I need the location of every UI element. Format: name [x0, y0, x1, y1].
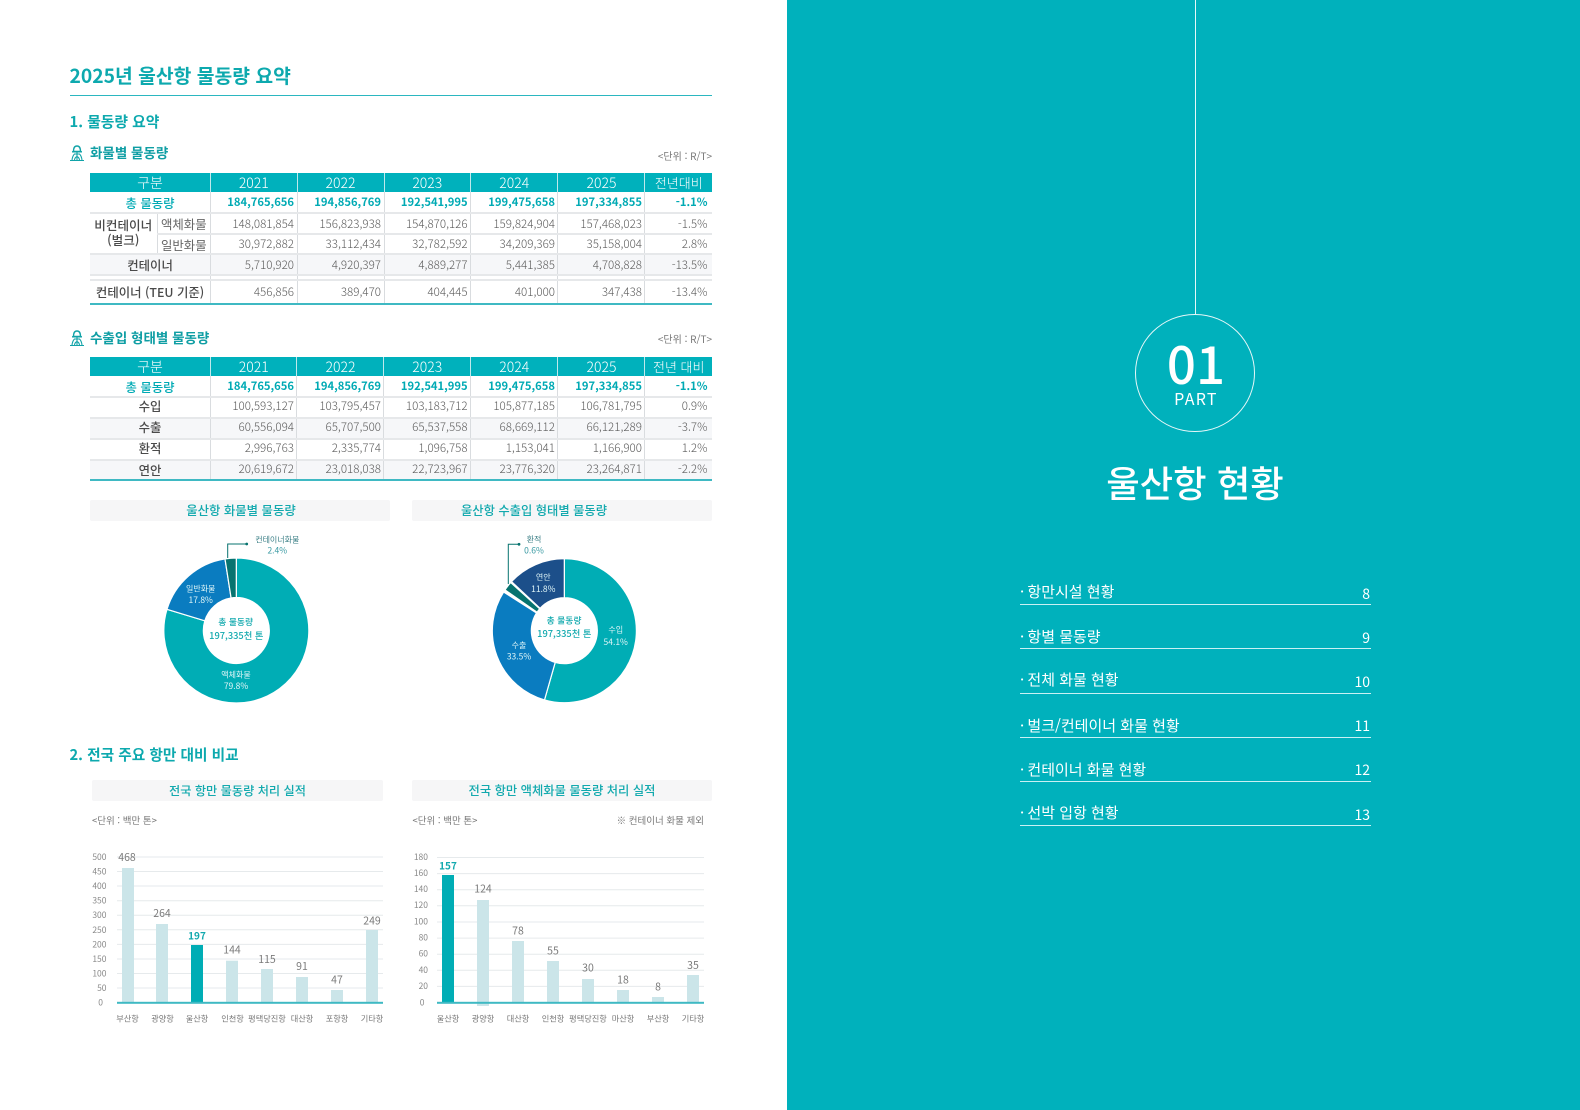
row: container TEU: 404,445: [427, 284, 468, 300]
subheading text: 수출입 형태별 물동량: [90, 327, 209, 347]
part number: 01: [1167, 324, 1225, 398]
row: container: -13.5%: [672, 257, 708, 273]
row: general bulk: 33,112,434: [326, 236, 381, 252]
page title: 2025년 울산항 물동량 요약: [70, 61, 291, 89]
list item: 선박 입항 현황: [1020, 800, 1371, 826]
bar chart: national throughput: 50: [97, 982, 107, 994]
slice labels: 액체화물: [221, 670, 251, 680]
list item: 항별 물동량: 9: [1362, 628, 1370, 648]
row: transshipment: 1,153,041: [506, 440, 555, 456]
row: transshipment: 2,335,774: [332, 440, 381, 456]
row: transshipment: 1,166,900: [593, 440, 642, 456]
gridlines and y axis: [117, 857, 383, 988]
row: export: 65,537,558: [412, 419, 468, 435]
leader line: [228, 544, 247, 558]
value labels: 468: [118, 850, 136, 865]
list item: 항만시설 현황: 8: [1362, 584, 1370, 604]
bars: [122, 868, 378, 1003]
category labels: 인천항: [221, 1012, 244, 1024]
row: container TEU: [96, 283, 708, 301]
row: export: 60,556,094: [239, 419, 294, 435]
row: transshipment: [139, 439, 708, 457]
slice labels: [186, 534, 299, 692]
bar chart: national throughput: 350: [92, 895, 107, 907]
chart title: national throughput: [92, 780, 383, 801]
row: total: 184,765,656: [227, 194, 294, 210]
bar chart: national liquid throughput: 100: [414, 916, 428, 928]
row: import: 100,593,127: [232, 398, 294, 414]
row: import: [139, 397, 708, 415]
unit note: <단위 : R/T>: [658, 331, 712, 346]
row: container TEU: -13.4%: [672, 284, 708, 300]
bars: [442, 875, 699, 1006]
spacer row: [90, 275, 712, 280]
unit note: left bar chart: <단위 : 백만 톤>: [92, 813, 157, 827]
category labels: 평택당진항: [569, 1012, 607, 1024]
category labels: 대산항: [507, 1012, 530, 1024]
row: total: 194,856,769: [314, 378, 381, 394]
bar chart: national liquid throughput: 80: [419, 932, 428, 944]
row: container: 5,710,920: [245, 257, 294, 273]
row: container: 5,441,385: [506, 257, 555, 273]
baseline: [117, 1002, 383, 1004]
row: coastal: 23,264,871: [587, 461, 642, 477]
list item: 선박 입항 현황: · 선박 입항 현황: [1020, 802, 1119, 823]
row: general bulk: 30,972,882: [239, 236, 294, 252]
bar chart: national liquid throughput: 40: [419, 964, 428, 976]
chart title: national liquid throughput: 전국 항만 액체화물 물동량 처리 실적: [469, 781, 655, 799]
row: container: 4,889,277: [418, 257, 468, 273]
center total: [537, 614, 592, 640]
row: general bulk: 34,209,369: [500, 236, 555, 252]
row: transshipment: 1.2%: [682, 440, 708, 456]
row: liquid bulk: 148,081,854: [232, 216, 294, 232]
value labels: [118, 850, 381, 988]
row: transshipment: 1,096,758: [418, 440, 468, 456]
donut ring: [164, 558, 309, 703]
row: coastal: 20,619,672: [239, 461, 294, 477]
row: total: -1.1%: [676, 194, 708, 210]
center total: 총 물동량: [218, 615, 253, 628]
slice labels: 수입: [608, 624, 623, 636]
category labels: 부산항: [116, 1012, 139, 1024]
list item: 전체 화물 현황: · 전체 화물 현황: [1020, 668, 1119, 690]
heading: section 2: 2. 전국 주요 항만 대비 비교: [70, 744, 239, 765]
row: coastal: -2.2%: [678, 461, 708, 477]
list item: 컨테이너 화물 현황: · 컨테이너 화물 현황: [1020, 759, 1146, 780]
row: liquid bulk: [94, 214, 708, 248]
leader line: [508, 544, 519, 584]
row: import: 0.9%: [682, 398, 708, 414]
value labels: 144: [223, 942, 241, 958]
row: total: 184,765,656: [227, 378, 294, 394]
bar chart: national liquid throughput: [414, 851, 705, 1024]
value labels: 264: [153, 906, 171, 921]
header row: 2024: [499, 356, 529, 376]
bar chart: national liquid throughput: 60: [419, 948, 428, 960]
icon: ship: [70, 145, 84, 161]
row: container TEU: 401,000: [515, 284, 555, 300]
bar chart: national throughput: [92, 850, 384, 1024]
baseline: [437, 1002, 704, 1004]
category labels: 부산항: [647, 1012, 670, 1024]
page title: [70, 66, 712, 96]
slice labels: 2.4%: [267, 544, 287, 556]
table: import export throughput: [90, 356, 712, 481]
category labels: 기타항: [361, 1012, 384, 1024]
bar chart: national liquid throughput: 0: [420, 996, 425, 1008]
row: liquid bulk: 157,468,023: [580, 216, 642, 232]
row: export: 66,121,289: [587, 419, 642, 435]
header row: 2025: [586, 356, 616, 376]
subheading: import export throughput: [70, 327, 712, 347]
list item: 선박 입항 현황: 13: [1354, 805, 1370, 825]
row: export: 65,707,500: [326, 419, 381, 435]
donut chart: cargo type: [164, 534, 309, 703]
header row: 2023: [412, 172, 442, 192]
bar chart: national liquid throughput: 120: [414, 899, 428, 911]
category labels: 광양항: [151, 1012, 174, 1024]
bar chart: national throughput: 250: [92, 924, 107, 936]
slice labels: 환적: [527, 534, 541, 545]
row: general bulk: 2.8%: [682, 236, 708, 252]
list item: 항별 물동량: [1020, 623, 1371, 649]
value labels: 78: [512, 924, 524, 938]
bar chart: national liquid throughput: 140: [414, 883, 428, 895]
contents list: [1020, 580, 1371, 826]
row: total: 194,856,769: [314, 194, 381, 210]
row: container: 4,920,397: [332, 257, 381, 273]
list item: 벌크/컨테이너 화물 현황: [1020, 712, 1371, 738]
list item: 전체 화물 현황: 10: [1354, 672, 1370, 692]
row: coastal: 23,018,038: [326, 461, 381, 477]
subheading: cargo throughput: [70, 142, 712, 163]
chart title: cargo donut: 울산항 화물별 물동량: [186, 501, 296, 519]
chart title: national liquid throughput: [412, 780, 712, 801]
value labels: 35: [687, 958, 699, 973]
list item: 컨테이너 화물 현황: 12: [1354, 760, 1370, 780]
donut chart: trade type: [492, 534, 636, 703]
category labels: 포항항: [326, 1012, 349, 1024]
header row: 전년 대비: [653, 357, 704, 376]
row: import: 103,183,712: [406, 398, 468, 414]
header row: 구분: [137, 172, 163, 192]
part badge circle: [1135, 314, 1255, 432]
header row: [90, 356, 712, 479]
list item: 벌크/컨테이너 화물 현황: 11: [1354, 716, 1370, 736]
row: total: 199,475,658: [488, 378, 555, 394]
row: total: 192,541,995: [401, 194, 468, 210]
slice labels: 컨테이너화물: [255, 534, 299, 546]
header row: (벌크): [107, 230, 139, 248]
row: export: 수출: [139, 418, 161, 436]
row: container TEU: 456,856: [254, 284, 294, 300]
category labels: 울산항: [437, 1012, 460, 1024]
row: total: 197,334,855: [575, 378, 642, 394]
row: export: 68,669,112: [500, 419, 555, 435]
unit note: right bar chart: <단위 : 백만 톤>: [412, 813, 477, 827]
center total: 197,335천 톤: [209, 628, 264, 642]
header row: 2022: [326, 172, 355, 192]
category labels: 평택당진항: [248, 1012, 286, 1024]
row: import: 106,781,795: [580, 398, 642, 414]
value labels: 55: [547, 944, 559, 958]
row: container: 4,708,828: [593, 257, 642, 273]
header row: 2025: [586, 172, 616, 192]
slice labels: 연안: [536, 572, 551, 583]
row: total: 192,541,995: [401, 378, 468, 394]
header row: 2022: [326, 356, 355, 376]
row: total: [126, 194, 708, 212]
category labels: 기타항: [682, 1012, 705, 1024]
chart title: trade type donut: [412, 500, 712, 521]
list item: 벌크/컨테이너 화물 현황: · 벌크/컨테이너 화물 현황: [1020, 714, 1180, 736]
row: coastal: 23,776,320: [500, 461, 555, 477]
row: container TEU: 컨테이너 (TEU 기준): [96, 283, 204, 301]
row: container: 컨테이너: [127, 256, 173, 274]
row: liquid bulk: 159,824,904: [493, 216, 555, 232]
bar chart: national throughput: 200: [92, 938, 107, 950]
unit note: <단위 : R/T>: [658, 148, 712, 163]
row: liquid bulk: 액체화물: [161, 215, 207, 233]
header row: 2024: [499, 172, 529, 192]
panel: right teal cover: [787, 0, 1580, 1110]
row: container: [90, 255, 712, 274]
value labels: 157: [439, 858, 457, 872]
list item: 항만시설 현황: · 항만시설 현황: [1020, 580, 1114, 602]
bar chart: national liquid throughput: 180: [414, 851, 428, 863]
row: export: [90, 418, 712, 438]
value labels: 18: [617, 972, 629, 988]
row: import: 105,877,185: [493, 398, 555, 414]
bar chart: national throughput: 400: [92, 880, 107, 892]
slice labels: 수출: [512, 640, 526, 651]
chart title: national throughput: 전국 항만 물동량 처리 실적: [169, 781, 306, 799]
list item: 전체 화물 현황: [1020, 668, 1371, 694]
row: general bulk: 32,782,592: [412, 236, 468, 252]
row: total: 총 물동량: [126, 194, 175, 212]
row: coastal: 연안: [139, 461, 161, 479]
slice labels: 11.8%: [531, 583, 556, 595]
value labels: 197: [188, 928, 206, 942]
slice labels: 54.1%: [604, 636, 628, 648]
bar chart: national throughput: 0: [98, 996, 103, 1008]
value labels: 124: [474, 882, 492, 896]
center total: 총 물동량: [547, 614, 581, 626]
row: general bulk: [161, 236, 708, 254]
hanging line: [1195, 0, 1196, 314]
header row: 구분: [137, 356, 163, 376]
header row: [90, 172, 712, 301]
chart title: trade type donut: 울산항 수출입 형태별 물동량: [461, 501, 607, 519]
row: liquid bulk: -1.5%: [678, 216, 708, 232]
center total: 197,335천 톤: [537, 626, 592, 640]
list item: 항만시설 현황: [1020, 578, 1371, 604]
part label: PART: [1174, 386, 1218, 410]
bar chart: national throughput: 300: [92, 909, 107, 921]
bar chart: national throughput: 100: [92, 968, 107, 980]
header row: 전년대비: [655, 173, 703, 192]
value labels: 91: [296, 959, 308, 974]
row: import: 103,795,457: [319, 398, 381, 414]
icon: ship: [70, 330, 84, 346]
row: total: -1.1%: [676, 378, 708, 394]
slice labels: 33.5%: [507, 650, 531, 662]
center total: [209, 615, 264, 642]
header row: 2023: [412, 356, 442, 376]
row: transshipment: 2,996,763: [245, 440, 294, 456]
row: total: [126, 378, 708, 396]
bar chart: national throughput: 150: [92, 953, 107, 965]
bar chart: national throughput: 500: [92, 851, 107, 863]
slice labels: 17.8%: [189, 594, 213, 606]
row: export: -3.7%: [678, 419, 708, 435]
row: coastal: [90, 461, 712, 479]
value labels: 47: [331, 972, 343, 988]
row: import: 수입: [139, 397, 161, 415]
donut ring: [492, 559, 636, 703]
slice labels: [507, 534, 628, 662]
row: liquid bulk: 156,823,938: [319, 216, 381, 232]
category labels: 울산항: [186, 1012, 209, 1024]
bar chart: national throughput: 450: [92, 866, 107, 878]
category labels: [116, 1012, 384, 1024]
row: coastal: 22,723,967: [412, 461, 468, 477]
row: liquid bulk: 154,870,126: [406, 216, 468, 232]
row: general bulk: 일반화물: [161, 236, 207, 254]
value labels: [439, 858, 699, 994]
list item: 컨테이너 화물 현황: [1020, 756, 1371, 782]
bar chart: national liquid throughput: 20: [419, 980, 428, 992]
bar chart: national liquid throughput: 160: [414, 867, 428, 879]
part title: 울산항 현황: [1106, 456, 1284, 508]
header row: 2021: [239, 356, 269, 376]
row: total: 197,334,855: [575, 194, 642, 210]
value labels: 115: [258, 952, 276, 967]
row: total: 199,475,658: [488, 194, 555, 210]
row: container TEU: 347,438: [602, 284, 642, 300]
list item: 항별 물동량: · 항별 물동량: [1020, 626, 1101, 647]
category labels: 인천항: [542, 1012, 565, 1024]
row: liquid bulk: 비컨테이너: [94, 214, 152, 234]
slice labels: 일반화물: [186, 584, 215, 594]
slice labels: 79.8%: [224, 680, 248, 692]
category labels: 마산항: [612, 1012, 635, 1024]
row: total: 총 물동량: [126, 378, 175, 396]
heading: section 1: 1. 물동량 요약: [70, 111, 159, 132]
category labels: 광양항: [472, 1012, 495, 1024]
value labels: 30: [582, 960, 594, 976]
category labels: [437, 1012, 705, 1024]
slice labels: 0.6%: [524, 544, 544, 556]
category labels: 대산항: [291, 1012, 314, 1024]
footnote: excludes container cargo: ※ 컨테이너 화물 제외: [617, 813, 704, 827]
value labels: 8: [655, 980, 661, 994]
row: transshipment: 환적: [139, 439, 161, 457]
row: container TEU: 389,470: [341, 284, 381, 300]
chart title: cargo donut: [90, 500, 390, 521]
header row: 2021: [239, 172, 269, 192]
value labels: 249: [363, 914, 381, 928]
row: general bulk: 35,158,004: [587, 236, 642, 252]
subheading text: 화물별 물동량: [90, 142, 168, 162]
table: cargo throughput: [90, 172, 712, 305]
gridlines and y axis: [437, 858, 704, 986]
